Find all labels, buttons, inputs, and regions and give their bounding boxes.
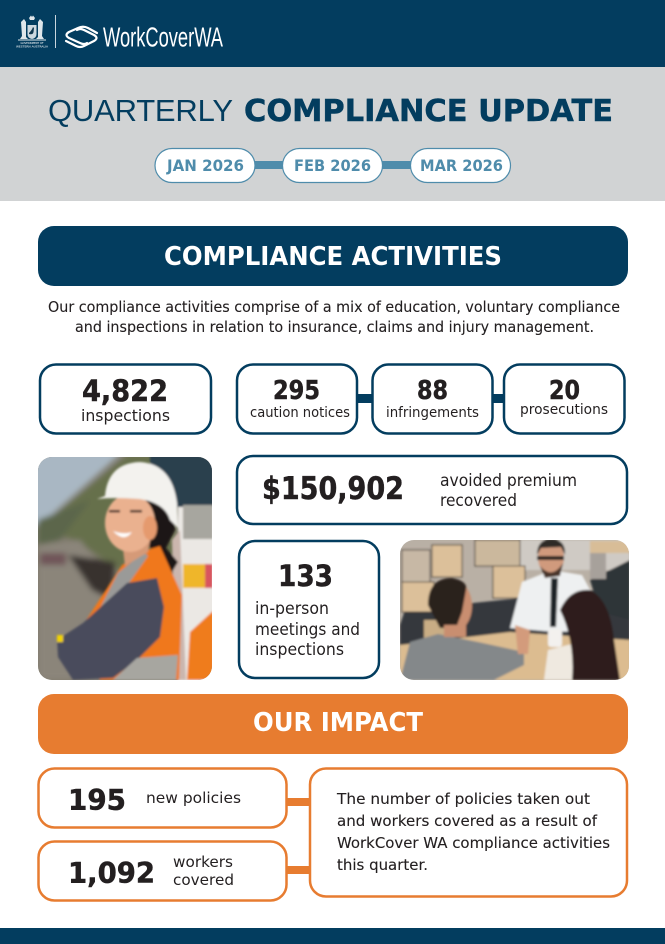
stat: caution notices: 295 <box>273 376 320 406</box>
vest <box>85 546 182 680</box>
photo: worker in hard hat and orange vest <box>38 457 212 680</box>
impact explanation callout: The number of policies taken out <box>336 790 590 808</box>
month pill: January: JAN 2026 <box>166 156 244 175</box>
stat: caution notices: caution notices <box>250 405 350 421</box>
title: COMPLIANCE UPDATE <box>244 94 613 129</box>
intro text: Our compliance activities comprise of a mix of education, voluntary compliance <box>48 298 620 316</box>
helmet <box>97 462 178 528</box>
neck <box>122 540 152 566</box>
impact explanation callout <box>310 768 627 896</box>
stat: new policies: 195 <box>68 784 126 817</box>
impact explanation callout: and workers covered as a result of <box>337 812 598 830</box>
stat: in-person meetings and inspections <box>239 541 379 678</box>
month pill: January <box>155 148 255 182</box>
month pill: March <box>410 148 510 182</box>
man left: shirt, head <box>400 634 524 680</box>
header banner <box>0 0 665 67</box>
stat: avoided premium recovered: avoided premium <box>440 471 577 491</box>
title: QUARTERLY <box>48 93 233 128</box>
man right: shirt, head <box>510 570 604 632</box>
stat: in-person meetings and inspections: in-person <box>255 599 329 618</box>
impact explanation callout: WorkCover WA compliance activities <box>337 834 610 852</box>
stat: in-person meetings and inspections: meetings and <box>255 620 360 639</box>
timeline connector <box>250 161 415 169</box>
WorkCover hands icon <box>66 27 97 47</box>
stat: prosecutions: prosecutions <box>520 402 608 418</box>
stat: workers covered <box>38 842 286 900</box>
stat: avoided premium recovered: $150,902 <box>262 471 404 507</box>
footer bar <box>0 928 665 944</box>
heading: compliance activities <box>38 226 628 286</box>
stat: workers covered: workers <box>173 853 233 871</box>
WorkCover WA wordmark: WorkCoverWA <box>103 22 223 52</box>
stat: inspections: 4,822 <box>82 374 168 408</box>
intro text <box>48 298 620 336</box>
government crest logo: WESTERN AUSTRALIA <box>16 44 49 48</box>
stat: new policies: new policies <box>146 789 241 807</box>
heading: our impact <box>38 694 628 754</box>
stat: prosecutions: 20 <box>549 376 580 406</box>
photo: office handshake meeting <box>400 539 630 680</box>
hair <box>146 500 178 572</box>
stat: workers covered: 1,092 <box>68 857 155 890</box>
stat: in-person meetings and inspections: 133 <box>278 559 333 593</box>
face <box>105 494 155 552</box>
jacket <box>57 578 164 680</box>
stat: inspections <box>40 364 211 434</box>
stat: caution notices <box>237 364 357 434</box>
title band <box>0 67 665 201</box>
enforcement stats group <box>237 364 624 434</box>
woman: top, hair, cup <box>542 643 574 680</box>
month pill: February: FEB 2026 <box>294 156 371 175</box>
stat: workers covered: covered <box>173 871 234 889</box>
title <box>48 93 613 129</box>
stat: prosecutions <box>504 364 624 434</box>
impact connectors <box>285 798 312 874</box>
stat: infringements <box>372 364 492 434</box>
stat: infringements: 88 <box>417 376 448 406</box>
government crest logo: GOVERNMENT OF <box>20 41 44 45</box>
month pill: March: MAR 2026 <box>420 156 503 175</box>
government crest logo <box>16 16 49 48</box>
stat: new policies <box>38 768 286 828</box>
shelves <box>402 540 525 612</box>
stat: in-person meetings and inspections: inspections <box>255 640 344 659</box>
impact explanation callout: this quarter. <box>337 856 428 874</box>
heading: compliance activities: COMPLIANCE ACTIVITIES <box>164 242 502 272</box>
stat: infringements: infringements <box>386 405 479 421</box>
stat: avoided premium recovered <box>237 456 627 524</box>
stat: inspections: inspections <box>81 406 170 425</box>
heading: our impact: OUR IMPACT <box>253 708 423 738</box>
month pill: February <box>282 148 382 182</box>
intro text: and inspections in relation to insurance, claims and injury management. <box>75 318 594 336</box>
stat: avoided premium recovered: recovered <box>440 491 517 511</box>
